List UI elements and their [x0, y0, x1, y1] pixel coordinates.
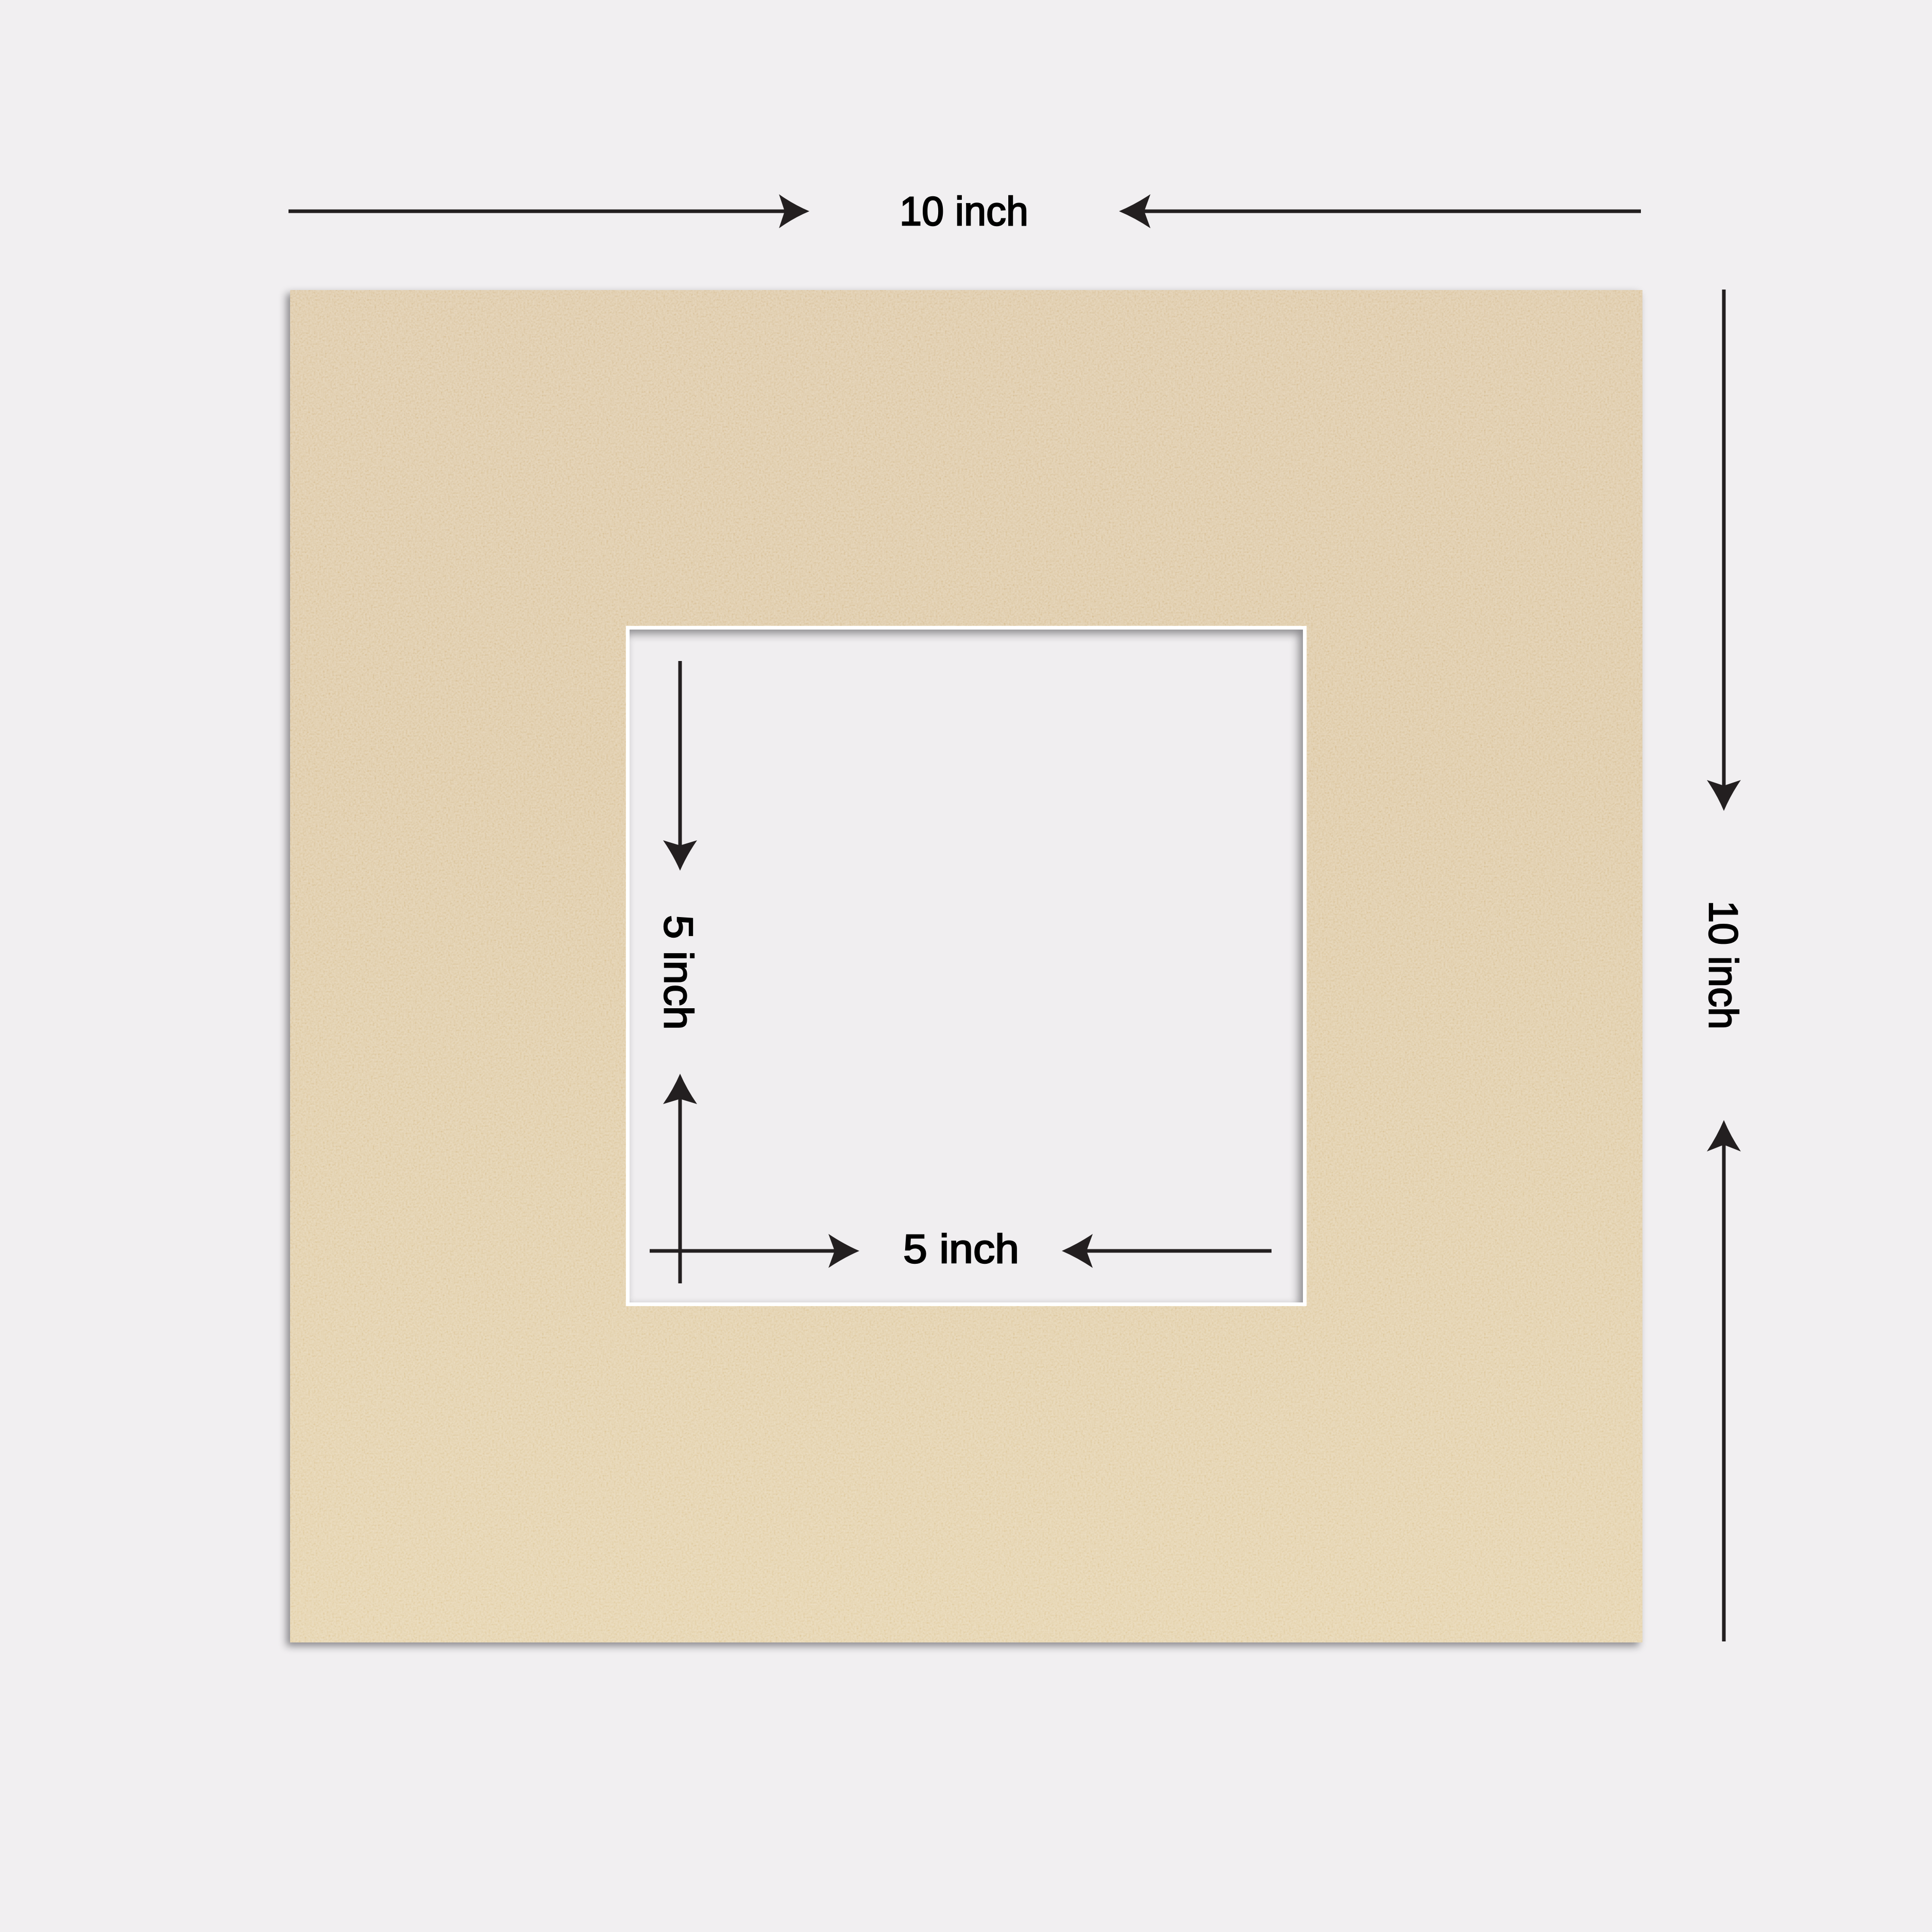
- label: window width 5 inch: 5 inch: [903, 1226, 1019, 1272]
- arrow: top width, pointing left: [1119, 194, 1641, 228]
- arrow: right height, pointing up: [1707, 1120, 1741, 1641]
- label: right height 10 inch: 10 inch: [1701, 901, 1747, 1029]
- panel: square window opening with white bevel: [626, 626, 1307, 1306]
- label: top width 10 inch: 10 inch: [900, 188, 1028, 234]
- arrow: window height, pointing up: [663, 1074, 697, 1283]
- paper grain texture: [290, 290, 1642, 1642]
- arrow: right height, pointing down: [1707, 290, 1741, 811]
- arrow: window height, pointing down: [663, 661, 697, 871]
- label: window height 5 inch: 5 inch: [656, 915, 702, 1030]
- arrow: top width, pointing right: [289, 194, 809, 228]
- arrow: window width, pointing left: [1062, 1234, 1272, 1268]
- panel: tan mat board: [290, 290, 1642, 1642]
- arrow: window width, pointing right: [650, 1234, 859, 1268]
